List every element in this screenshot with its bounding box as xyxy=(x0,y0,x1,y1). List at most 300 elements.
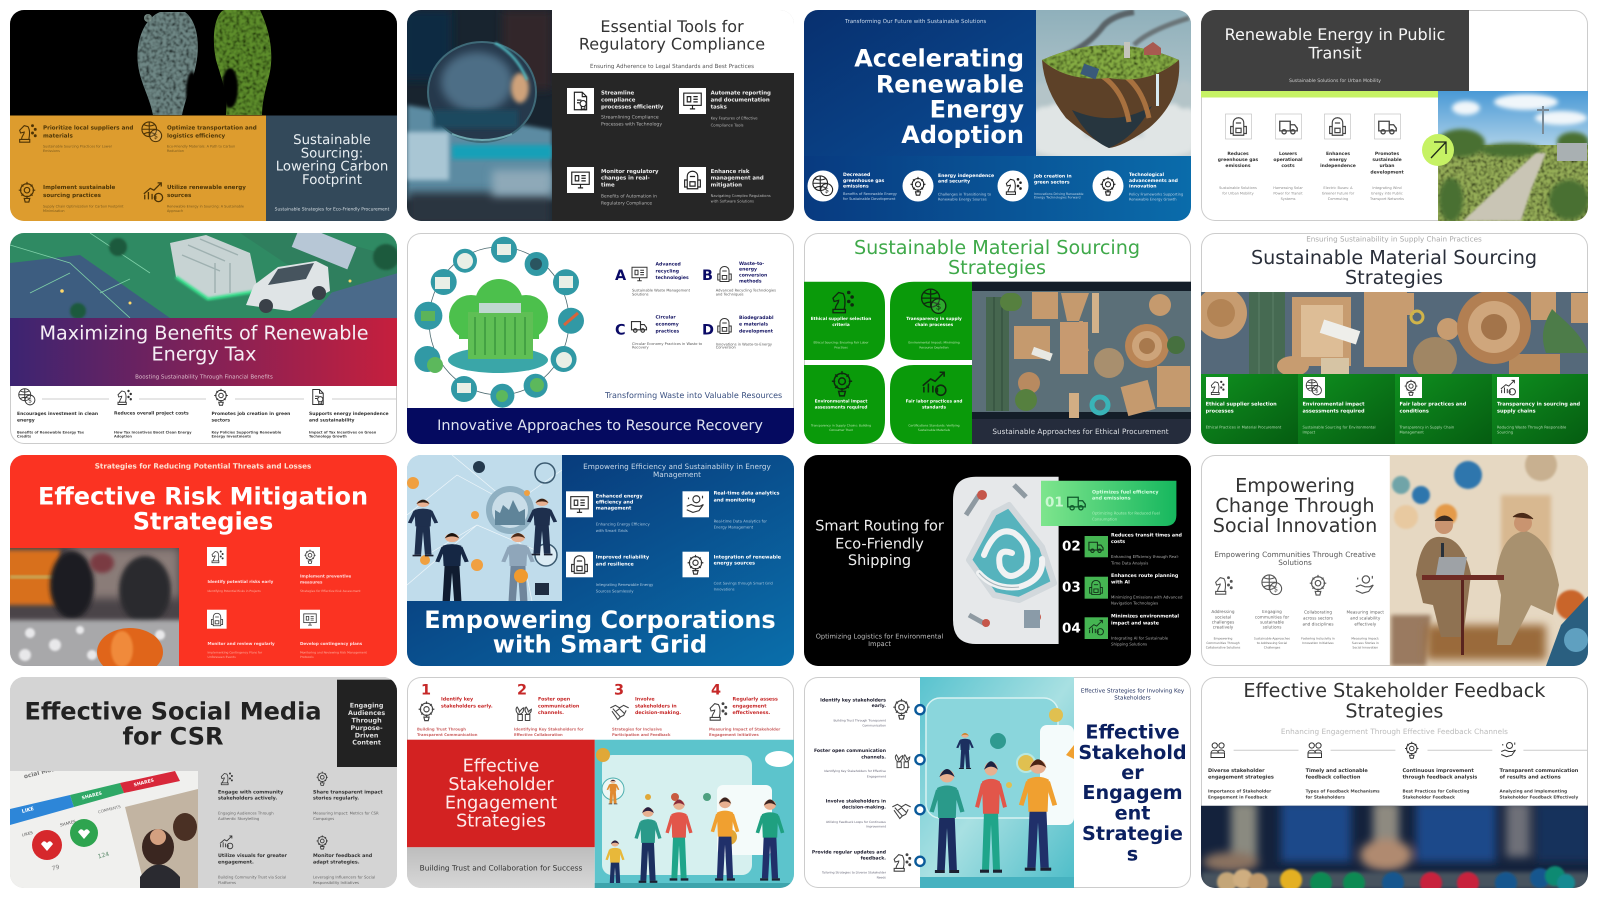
block: transparency: Transparency in supply xyxy=(906,315,962,321)
item A: A xyxy=(615,268,627,284)
item A: Sustainable Waste Management xyxy=(632,288,691,292)
subtitle: Ensuring Adherence to Legal Standards and Best Practices xyxy=(590,63,754,70)
subtitle: Empowering Communities Through Creative xyxy=(1214,550,1376,558)
title: Stakehold xyxy=(1078,740,1187,764)
title: Engagement xyxy=(445,793,557,813)
title: Strategies xyxy=(133,508,273,536)
item: monitor: Benefits of Automation in xyxy=(601,193,657,199)
photo: social metrics screen: LIKE xyxy=(21,806,35,815)
item B: Waste-to- xyxy=(739,260,764,266)
item 03: Enhances route planning xyxy=(1111,572,1179,578)
caption: Sustainable Approaches for Ethical Procurement xyxy=(992,427,1169,436)
item: engaging: to Addressing Social xyxy=(1257,641,1287,645)
title: Maximizing Benefits of Renewable xyxy=(39,320,369,344)
tagline box: Through xyxy=(352,716,382,724)
slide: Material Sourcing white xyxy=(1201,232,1588,444)
block: fair labor xyxy=(890,364,972,444)
illustration: maze of routes xyxy=(953,477,1059,644)
item: monitor xyxy=(567,167,659,206)
step 4: effectiveness. xyxy=(732,710,770,716)
item: engage: stakeholders actively. xyxy=(218,795,277,801)
subtitle: Management xyxy=(653,470,701,478)
step 1: Building Trust Through xyxy=(417,726,466,731)
illustration: EV and battery plant xyxy=(10,233,397,318)
step 2: Effective Collaboration xyxy=(514,732,563,736)
block: fair labor: Sustainable Materials xyxy=(918,428,951,432)
item: enhanced efficiency: Enhanced energy xyxy=(596,493,643,499)
item: promotes: Promotes job creation in green xyxy=(212,410,290,416)
item: identify: Identify potential risks early xyxy=(208,579,274,584)
item: streamline: Streamline xyxy=(601,89,635,96)
item B: methods xyxy=(739,278,762,284)
item: enhance xyxy=(679,167,771,203)
item: ethical: Ethical supplier selection xyxy=(1206,401,1277,407)
item: transparent: Stakeholder Feedback Effectively xyxy=(1500,794,1578,799)
item: real-time analytics: Real-time data analytics xyxy=(714,490,780,496)
item: renewable sources: Renewable Energy in Sourcing: A Sustainable xyxy=(167,205,244,209)
item 02: costs xyxy=(1111,538,1125,544)
item: foster: Foster open communication xyxy=(814,748,886,754)
item: implement practices: Supply Chain Optimization for Carbon Footprint xyxy=(43,205,124,209)
item: prioritize local suppliers: Sustainable Sourcing Practices for Lower xyxy=(43,145,113,149)
item 04: impact and waste xyxy=(1111,620,1160,626)
item: collaborating: Innovation Initiatives xyxy=(1302,641,1334,645)
item: timely: feedback collection xyxy=(1306,775,1361,781)
block: ethical supplier xyxy=(804,281,885,360)
item 01 highlighted: Optimizes fuel efficiency xyxy=(1092,489,1159,495)
tagline box: Purpose- xyxy=(351,724,383,732)
item 02: Time Data Analysis xyxy=(1110,560,1148,565)
tagline box: Engaging xyxy=(350,701,384,709)
item: promotes: sectors xyxy=(212,416,230,422)
item B: energy xyxy=(739,267,757,272)
item: optimize transportation: Reduction xyxy=(167,149,184,153)
title: Effective Stakeholder Feedback xyxy=(1243,678,1546,701)
step 4 xyxy=(709,682,780,736)
item: addressing: Collaborative Solutions xyxy=(1206,646,1241,650)
item: addressing: Addressing xyxy=(1211,608,1235,614)
item: utilize: Utilize visuals for greater xyxy=(218,852,288,858)
item: automate: tasks xyxy=(711,103,727,110)
item: prioritize local suppliers: materials xyxy=(43,133,73,140)
item: foster: channels. xyxy=(861,754,886,760)
title: Engagem xyxy=(1082,780,1183,804)
step 2: 2 xyxy=(517,682,527,698)
item: integration: energy sources xyxy=(714,561,755,566)
item: decreased emissions: Benefits of Renewable Energy xyxy=(843,192,898,196)
block: fair labor: Fair labor practices and xyxy=(906,398,962,404)
item: transparent: Analyzing and Implementing xyxy=(1500,788,1567,793)
item: measuring: Measuring impact xyxy=(1347,609,1384,614)
item 02 xyxy=(1062,532,1183,565)
item: engaging: solutions xyxy=(1263,624,1281,629)
item: addressing: challenges xyxy=(1212,619,1234,624)
illustration: team handshake xyxy=(594,740,794,888)
photo: social metrics screen xyxy=(10,758,198,888)
title: Effective Social Media xyxy=(24,697,322,725)
item: renewable sources xyxy=(144,183,246,213)
photo: packaging flat-lay xyxy=(972,282,1191,419)
item: monitor: Monitor and review regularly xyxy=(208,641,275,646)
item: enhance: mitigation xyxy=(711,182,742,189)
item: utilize: engagement. xyxy=(218,859,254,865)
photo: green path under sky xyxy=(1438,91,1588,221)
item: transparency: supply chains xyxy=(1497,408,1536,414)
item: continuous: Continuous improvement xyxy=(1402,768,1474,774)
item: continuous: Best Practices for Collecting xyxy=(1402,788,1469,793)
photo: social metrics screen: 124 xyxy=(97,851,110,860)
item: automate: Compliance Tools xyxy=(711,122,744,127)
slide: Social Media CSR xyxy=(10,677,397,888)
item: decreased emissions: emissions xyxy=(843,183,869,189)
item: encourages: Benefits of Renewable Energy Tax xyxy=(17,430,85,434)
item A: recycling xyxy=(656,267,679,273)
subtitle: Enhancing Engagement Through Effective Feedback Channels xyxy=(1281,727,1508,736)
item 02: Reduces transit times and xyxy=(1111,532,1183,538)
item: enhance: Enhance risk xyxy=(711,168,750,175)
item: transparency: Reducing Waste Through Responsible xyxy=(1497,425,1567,429)
item: addressing: societal xyxy=(1215,614,1231,619)
panel: orange list xyxy=(10,116,266,222)
item: promotes: Key Policies Supporting Renewable xyxy=(212,430,282,434)
block: transparency xyxy=(890,281,972,360)
item: streamline: Processes with Technology xyxy=(601,121,662,127)
step 3: Strategies for Inclusive xyxy=(612,726,662,731)
step 3: Participation and Feedback xyxy=(612,732,671,736)
title: Strategies xyxy=(948,255,1046,278)
item: continuous: Stakeholder Feedback xyxy=(1402,794,1455,799)
step 3: 3 xyxy=(614,682,624,698)
item: monitor: Monitor feedback and xyxy=(313,852,373,858)
item: encourages: Encourages investment in clean xyxy=(17,410,98,416)
slide: Stakeholder Engagement teal xyxy=(804,677,1191,888)
item: monitor: Monitor regulatory xyxy=(601,168,659,175)
item: monitor: time xyxy=(601,182,615,189)
item: involve: Utilizing Feedback Loops for Continuous xyxy=(826,820,886,824)
item: promotes: sustainable xyxy=(1372,156,1402,162)
title: Sustainable xyxy=(293,132,371,148)
item: share: stories regularly. xyxy=(313,795,359,801)
title: Eco-Friendly xyxy=(835,536,924,552)
item: addressing: creatively xyxy=(1213,624,1234,629)
item: lowers: costs xyxy=(1281,162,1295,168)
item: job creation: Innovations Driving Renewable xyxy=(1034,192,1084,196)
item: supports xyxy=(309,389,398,438)
item 03: 03 xyxy=(1062,580,1081,596)
item: decreased emissions: Decreased xyxy=(843,172,870,178)
title: with Smart Grid xyxy=(493,630,707,658)
item: promotes: Integrating Wind xyxy=(1372,186,1402,190)
photo: social metrics screen: ocial Media Metrics xyxy=(23,758,89,780)
item: decreased emissions: for Sustainable Development xyxy=(843,197,896,201)
item 01 highlighted: Optimizing Routes for Reduced Fuel xyxy=(1092,510,1160,515)
item: develop: Protocols xyxy=(300,655,314,659)
item: automate: Key Features of Effective xyxy=(711,115,758,120)
tagline box: Audiences xyxy=(348,709,385,717)
item: foster xyxy=(814,748,925,778)
item: transparency xyxy=(1497,376,1581,434)
photo: social metrics screen: LIKES xyxy=(21,830,34,837)
item: independence: Renewable Energy Sources xyxy=(938,197,987,201)
slide: Sustainable Sourcing xyxy=(10,10,397,221)
item: decreased emissions: greenhouse gas xyxy=(843,178,885,184)
title: for CSR xyxy=(123,722,223,750)
title: ent xyxy=(1115,801,1150,824)
item: implement: Strategies for Effective Risk Assessment xyxy=(300,589,361,593)
title: Renewable Energy in Public xyxy=(1225,24,1445,44)
item 01 highlighted: and emissions xyxy=(1092,495,1131,501)
photo: social metrics screen: SHARES xyxy=(81,791,103,801)
item: enhanced efficiency: Enhancing Energy Efficiency xyxy=(596,521,650,526)
tagline: Transforming Waste into Valuable Resources xyxy=(604,391,782,400)
item 04: 04 xyxy=(1062,621,1081,637)
item B xyxy=(702,260,776,296)
title: s xyxy=(1127,842,1138,865)
title: Empowering Corporations xyxy=(424,606,776,634)
item: fair labor: Fair labor practices and xyxy=(1400,401,1467,407)
item: engaging: Sustainable Approaches xyxy=(1254,636,1291,640)
title: Effective xyxy=(1085,720,1180,743)
block: ethical supplier: Practices xyxy=(834,345,848,349)
bar: caption xyxy=(972,418,1192,444)
item: measuring xyxy=(1347,576,1384,650)
item C: C xyxy=(615,322,626,338)
item: environmental xyxy=(1302,376,1376,434)
slide: Risk Mitigation xyxy=(10,455,397,666)
item: reduces: emissions xyxy=(1225,162,1251,168)
item: lowers: Lowers xyxy=(1279,150,1297,156)
item: utilize xyxy=(218,836,288,884)
step 2: communication xyxy=(538,703,580,709)
item: monitor xyxy=(313,835,375,884)
item: monitor: Regulatory Compliance xyxy=(601,200,652,206)
item: automate: and documentation xyxy=(711,96,770,103)
title: Effective xyxy=(463,756,539,776)
item: lowers: Power for Transit xyxy=(1273,191,1303,195)
item: enhances: independence xyxy=(1320,162,1356,168)
item: engage xyxy=(218,773,284,820)
item: renewable sources: sources xyxy=(167,193,192,199)
title: Strategies xyxy=(456,812,546,832)
item: engaging: Challenges xyxy=(1264,646,1281,650)
panel: slate title xyxy=(266,116,398,222)
item: share: Share transparent impact xyxy=(313,789,383,795)
title: Accelerating xyxy=(854,45,1024,73)
item: monitor: Implementing Contingency Plans for xyxy=(208,651,263,655)
subtitle: Sustainable Solutions for Urban Mobility xyxy=(1289,78,1381,84)
item: collaborating: across sectors xyxy=(1303,615,1333,620)
item D xyxy=(702,314,774,349)
tagline box: Driven xyxy=(355,731,379,739)
item: independence xyxy=(902,170,994,202)
photo: packaging flat-lay xyxy=(1201,292,1588,374)
item 03: Navigation Technologies xyxy=(1111,600,1158,605)
panel: grey caption xyxy=(407,847,595,888)
illustration: business people network xyxy=(407,455,562,601)
item: supports: Impact of Tax Incentives on Green xyxy=(309,430,377,434)
block: transparency: chain processes xyxy=(915,321,954,327)
item: environmental: Impact xyxy=(1302,430,1316,434)
item: identify: Communication xyxy=(862,723,886,727)
item: environmental: Sustainable Sourcing for Environmental xyxy=(1302,425,1376,429)
item: optimize transportation xyxy=(142,122,257,153)
item D: development xyxy=(739,327,774,333)
item: enhances: energy xyxy=(1329,158,1347,162)
title: Sourcing: xyxy=(301,146,363,161)
photo: blurred workers and glove xyxy=(10,548,179,666)
item: promotes: urban xyxy=(1380,162,1394,168)
panel: blue bottom band xyxy=(804,156,1192,221)
block: environmental xyxy=(804,364,885,444)
item: real-time analytics xyxy=(682,490,780,529)
item: automate: Automate reporting xyxy=(711,89,771,96)
block: environmental: Consumer Trust xyxy=(829,428,854,432)
title: Innovative Approaches to Resource Recovery xyxy=(437,418,763,434)
item D: D xyxy=(702,322,714,338)
item: addressing: Empowering xyxy=(1214,636,1232,640)
item: involve: Improvement xyxy=(866,825,887,829)
item: real-time analytics: Real-time Data Analytics for xyxy=(714,518,767,523)
slide: Maximizing Tax Benefits xyxy=(10,232,397,444)
item: enhance: with Software Solutions xyxy=(711,199,754,203)
item: reduces: Adoption xyxy=(114,434,132,438)
title: Empowering xyxy=(1235,474,1355,496)
item: prioritize local suppliers xyxy=(20,125,133,153)
item 03 xyxy=(1062,572,1183,605)
title: Transit xyxy=(1308,43,1362,62)
step 4: Measuring Impact of Stakeholder xyxy=(709,726,780,731)
tagline box xyxy=(337,680,398,767)
item 03: Minimizing Emissions with Advanced xyxy=(1111,594,1183,599)
item: promotes: Energy Investments xyxy=(212,434,251,438)
background xyxy=(10,455,398,666)
item: measuring: Success Stories in xyxy=(1352,641,1379,645)
item: measuring: and scalability xyxy=(1350,615,1381,620)
block: environmental: assessments required xyxy=(815,404,867,410)
photo: social metrics screen: 79 xyxy=(51,864,60,872)
illustration: recycling bin ring xyxy=(414,236,584,407)
item: enhanced efficiency: management xyxy=(596,505,632,511)
item: encourages: Credits xyxy=(17,434,31,438)
item B: B xyxy=(702,268,713,284)
panel: dark list xyxy=(552,73,795,221)
background xyxy=(804,455,1192,666)
item: lowers: operational xyxy=(1273,156,1303,162)
item: real-time analytics: Energy Management xyxy=(714,524,754,529)
item: enhanced efficiency: with Smart Grids xyxy=(596,528,628,532)
item: optimize transportation: Optimize transportation and xyxy=(167,125,257,132)
item C: practices xyxy=(656,327,679,333)
item: addressing xyxy=(1206,577,1241,650)
item: engage: Engaging Audiences Through xyxy=(218,810,274,815)
item: reduces xyxy=(114,390,206,438)
item: integration: Integration of renewable xyxy=(714,554,782,560)
title: Adoption xyxy=(901,121,1024,149)
step 4: engagement xyxy=(732,703,767,709)
step 2: Foster open xyxy=(538,696,571,702)
item: reduces: Reduces xyxy=(1227,150,1249,156)
item: engage: Engage with community xyxy=(218,789,284,795)
illustration: floating island xyxy=(1036,10,1191,156)
item: implement: measures xyxy=(300,579,323,584)
item 02: Enhancing Efficiency through Real- xyxy=(1111,554,1180,558)
block: environmental: Environmental impact xyxy=(815,398,867,404)
block: ethical supplier: Ethical Sourcing: Ensuring Fair Labor xyxy=(813,340,869,344)
item: supports: Technology Growth xyxy=(309,434,347,438)
step 1: Identify key xyxy=(441,696,474,702)
photo: social metrics screen: SHARES xyxy=(59,819,77,827)
item: monitor: Unforeseen Events xyxy=(208,655,236,659)
item: promotes: Promotes xyxy=(1375,150,1399,156)
item 03: with AI xyxy=(1111,579,1130,585)
item: collaborating: and disciplines xyxy=(1302,621,1334,626)
item: collaborating: Fostering Inclusivity in xyxy=(1301,636,1335,640)
item: reliability: and resilience xyxy=(596,561,634,567)
item: timely: Types of Feedback Mechanisms xyxy=(1306,788,1380,793)
item: provide: Tailoring Strategies to Diverse Stakeholder xyxy=(821,871,887,875)
item A xyxy=(615,261,691,296)
photo: social metrics screen: SHARES xyxy=(133,778,155,788)
item: identify: Building Trust Through Transparent xyxy=(833,718,887,722)
subtitle: Solutions xyxy=(1278,558,1312,566)
item 04: Minimizes environmental xyxy=(1111,613,1179,619)
item: collaborating xyxy=(1301,575,1335,645)
title: Change Through xyxy=(1215,494,1375,516)
slide: Resource Recovery xyxy=(407,232,794,444)
item D: Biodegradabl xyxy=(739,314,774,320)
item: enhances: Enhances xyxy=(1326,150,1350,156)
item: engaging: sustainable xyxy=(1260,619,1284,624)
item D: Innovations in Waste-to-Energy xyxy=(716,342,773,346)
item: environmental: Environmental impact xyxy=(1302,401,1365,407)
item: develop xyxy=(300,610,368,659)
item: enhances: Electric Buses: A xyxy=(1323,186,1353,190)
item: engage: Authentic Storytelling xyxy=(218,816,260,820)
item: fair labor: conditions xyxy=(1400,408,1429,414)
step 2 xyxy=(514,682,584,736)
item: promotes xyxy=(212,388,304,438)
item: utilize: Building Community Trust via Social xyxy=(218,874,286,879)
item 01 highlighted: 01 xyxy=(1045,495,1064,511)
item: implement practices: Minimization xyxy=(43,209,65,213)
block: environmental: Transparency in Supply Chains: Building xyxy=(810,423,871,427)
item: reduces: greenhouse gas xyxy=(1218,156,1259,162)
item: lowers xyxy=(1273,114,1303,201)
lime bar xyxy=(1201,91,1438,98)
block: transparency: Environmental Impact: Minimizing xyxy=(908,340,960,344)
item: diverse: Engagement in Feedback xyxy=(1208,794,1268,799)
step 4: Engagement Initiatives xyxy=(709,732,760,736)
title: Strategie xyxy=(1082,822,1183,844)
item: timely: for Stakeholders xyxy=(1306,794,1345,799)
caption: Building Trust and Collaboration for Success xyxy=(420,864,582,872)
arrow badge xyxy=(1422,134,1454,166)
item D: Conversion xyxy=(716,345,736,349)
item: provide: Needs xyxy=(877,876,886,880)
subtitle: Optimizing Logistics for Environmental xyxy=(816,633,943,641)
item 04: Integrating AI for Sustainable xyxy=(1111,635,1169,640)
item: enhanced efficiency xyxy=(566,491,650,532)
item: timely xyxy=(1306,743,1395,799)
panel: blue title area xyxy=(804,10,1036,156)
subtitle: Transforming Our Future with Sustainable Solutions xyxy=(844,18,986,25)
item: technological: Technological xyxy=(1129,172,1164,178)
item D: e materials xyxy=(739,321,768,327)
subtitle: Sustainable Strategies for Eco-Friendly Procurement xyxy=(275,206,390,212)
slide: Smart Routing xyxy=(804,455,1191,666)
slide: Social Innovation xyxy=(1201,455,1588,666)
item: monitor: Leveraging Influencers for Social xyxy=(313,874,375,879)
